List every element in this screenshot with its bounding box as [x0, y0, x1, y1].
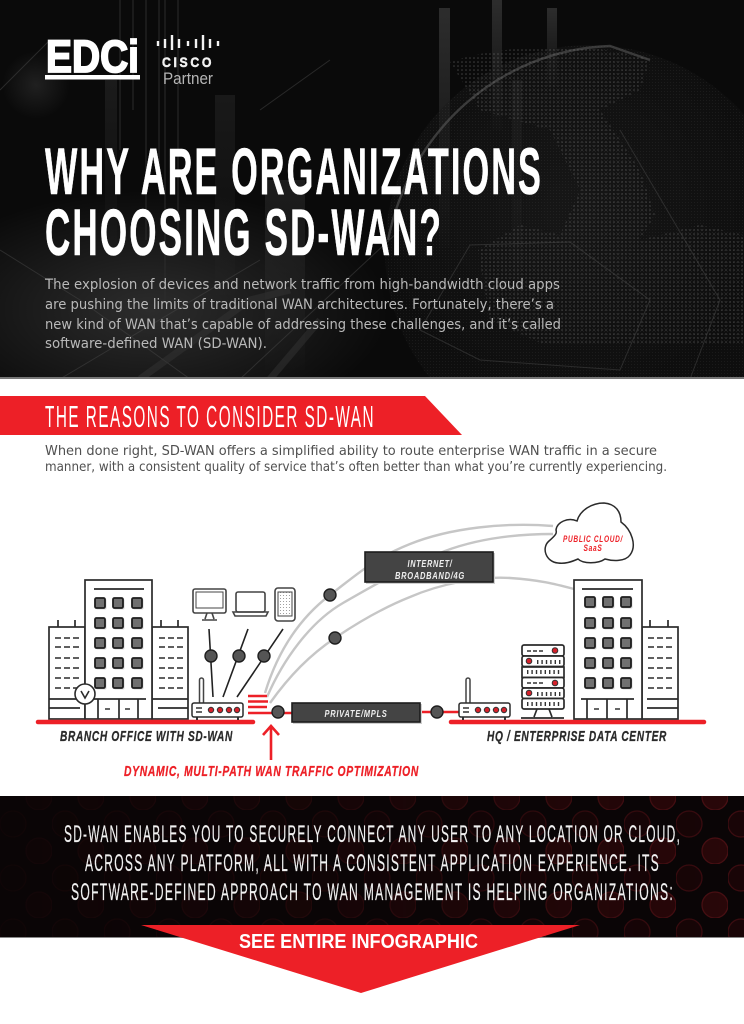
intro text	[44, 276, 561, 352]
icon: public cloud	[545, 503, 633, 563]
logo: Cisco Partner: CISCO	[162, 54, 214, 70]
intro text: new kind of WAN that’s capable of addressing these challenges, and it’s called	[45, 316, 561, 333]
callout: see entire infographic arrow: SEE ENTIRE INFOGRAPHIC	[239, 931, 478, 953]
icon: server rack	[521, 645, 564, 718]
logo: EDCi: EDCi	[46, 31, 139, 82]
section description: manner, with a consistent quality of service that’s often better than what you’re currently experiencing.	[45, 460, 667, 475]
icon: public cloud: PUBLIC CLOUD/	[563, 534, 623, 545]
callout: see entire infographic arrow	[141, 925, 580, 993]
router: branch	[192, 678, 243, 720]
panel: header background	[0, 0, 744, 379]
building: HQ	[574, 580, 678, 719]
red ground line: HQ	[451, 720, 704, 724]
label: branch office: BRANCH OFFICE WITH SD-WAN	[60, 728, 233, 745]
nodes on MPLS path	[272, 706, 443, 718]
network diagram	[38, 503, 704, 780]
label: internet broadband 4G	[365, 552, 495, 584]
label: private MPLS: PRIVATE/MPLS	[324, 708, 388, 720]
gray internet paths	[265, 525, 574, 703]
label: internet broadband 4G: INTERNET/	[408, 558, 453, 570]
building: branch office	[49, 580, 188, 719]
panel: SD-WAN summary	[0, 796, 744, 938]
red ground line: branch	[38, 720, 253, 724]
icon: desktop monitor	[193, 589, 226, 620]
section banner: the reasons to consider SD-WAN: THE REASONS TO CONSIDER SD-WAN	[45, 399, 375, 434]
icon: laptop	[233, 592, 268, 616]
icon: branch SD-WAN badge	[75, 684, 95, 704]
nodes on internet paths	[324, 589, 341, 644]
logo: Cisco Partner: Partner	[163, 69, 213, 88]
section description	[45, 444, 667, 475]
device connections	[205, 629, 283, 697]
label: dynamic multi-path optimization: DYNAMIC, MULTI-PATH WAN TRAFFIC OPTIMIZATION	[124, 763, 419, 780]
arrow: optimization point	[263, 726, 279, 760]
label: internet broadband 4G: BROADBAND/4G	[395, 570, 465, 582]
icon: tablet	[275, 588, 295, 621]
intro text: software-defined WAN (SD-WAN).	[45, 335, 267, 352]
title	[45, 134, 543, 269]
section banner: the reasons to consider SD-WAN	[0, 396, 462, 435]
logo: Cisco Partner	[158, 35, 218, 88]
icon: public cloud: SaaS	[584, 543, 602, 554]
section description: When done right, SD-WAN offers a simplified ability to route enterprise WAN traffic in a secure	[45, 444, 657, 459]
red MPLS line	[420, 711, 460, 713]
label: private MPLS	[292, 703, 422, 724]
multi-path bars	[248, 696, 292, 713]
intro text: are pushing the limits of traditional WAN architectures. Fortunately, there’s a	[45, 296, 554, 313]
intro text: The explosion of devices and network traffic from high-bandwidth cloud apps	[44, 276, 560, 293]
router: HQ	[459, 678, 510, 720]
